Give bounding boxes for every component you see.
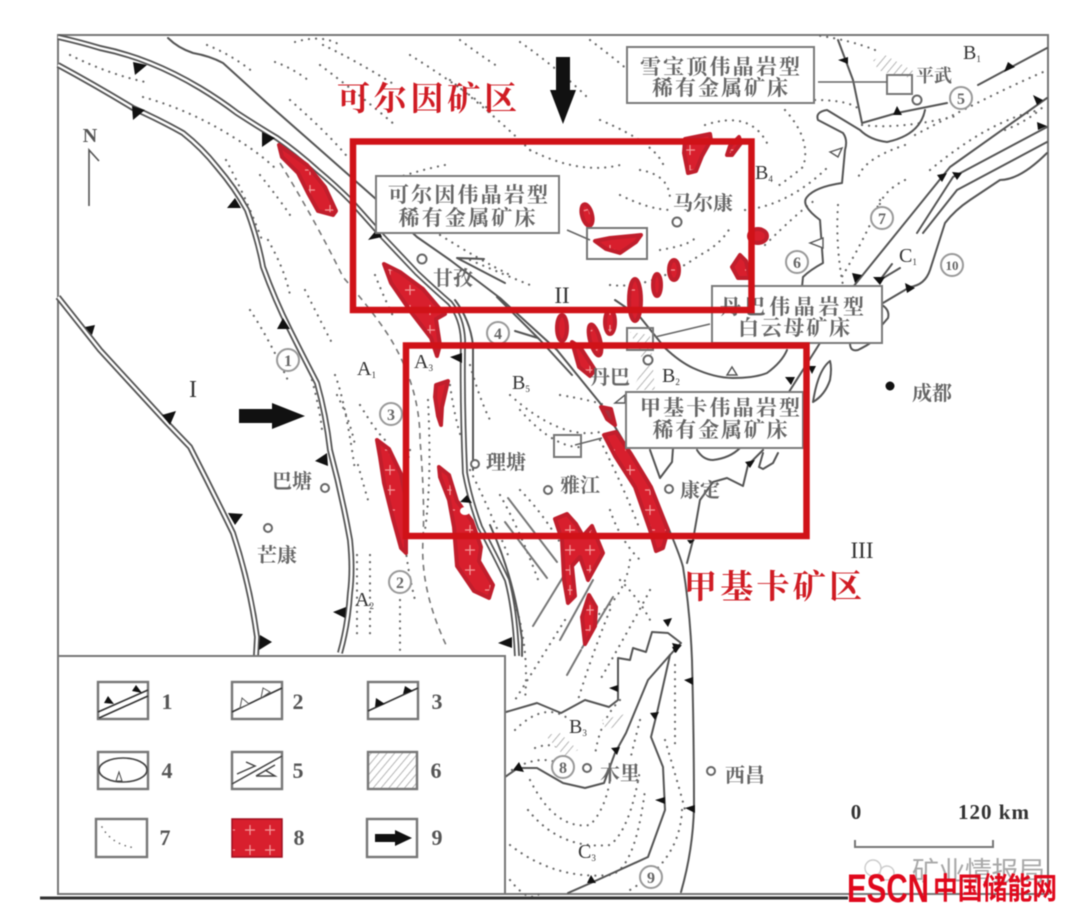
legend panel (58, 656, 505, 894)
legend 4: dome: 4 (162, 758, 172, 783)
city markers and names: 成都 (912, 382, 952, 405)
legend 2: open triangle fault: 2 (292, 689, 304, 714)
callout: Danba deposit: 白云母矿床 (738, 316, 850, 340)
fault: northern double line (58, 37, 517, 656)
tectonic unit labels (189, 42, 981, 863)
circled fault numbers: 4 (494, 326, 502, 343)
scale bar (851, 800, 1030, 847)
pegmatite bodies (279, 134, 767, 644)
tectonic unit labels: II (554, 283, 570, 308)
callout: Xuebaoding deposit (627, 47, 814, 103)
callout: Xuebaoding deposit: 雪宝顶伟晶岩型 (640, 55, 800, 79)
legend 6: hatched zone: 6 (430, 758, 442, 783)
legend 1: double-line thrust (98, 682, 172, 719)
circled fault numbers: 10 (946, 258, 958, 273)
city markers and names: 马尔康 (673, 191, 733, 215)
city markers and names: 康定 (680, 478, 720, 502)
hatched zones (545, 55, 915, 757)
deposit locator boxes (554, 75, 912, 457)
city markers and names: 西昌 (725, 764, 765, 787)
tectonic unit labels: A (414, 351, 428, 373)
tectonic unit labels: 4 (768, 174, 773, 184)
tectonic unit labels: 5 (525, 384, 530, 394)
tectonic unit labels: C (899, 245, 912, 267)
callout: Jiajika deposit (626, 392, 803, 448)
minor faults near Yajiang (505, 498, 613, 675)
logo: ESCN China Energy Storage Network: ESCN (847, 867, 929, 911)
tectonic unit labels: 2 (675, 377, 680, 387)
arrow: compression from west (239, 403, 305, 429)
callout: Keeryin deposit: 可尔因伟晶岩型 (388, 183, 548, 207)
city markers and names: 理塘 (486, 451, 526, 474)
circled fault numbers: 6 (793, 255, 801, 272)
legend 6: hatched zone (368, 752, 442, 789)
legend 4: dome (98, 752, 172, 789)
legend 8: pegmatite pattern: 8 (294, 825, 304, 850)
legend 8: pegmatite pattern (232, 819, 304, 857)
callout: Danba deposit: 丹巴伟晶岩型 (720, 295, 864, 319)
fault: far west double line (58, 297, 257, 656)
legend 3: thrust fault (368, 682, 442, 719)
circled fault numbers (277, 87, 972, 888)
tectonic unit labels: 1 (976, 54, 981, 64)
logo: ESCN China Energy Storage Network: 中国储能网 (933, 873, 1057, 906)
tectonic unit labels: 1 (371, 370, 376, 380)
slip arrows (457, 258, 505, 283)
legend 9: arrow: 9 (432, 825, 442, 850)
circled fault numbers: 7 (878, 211, 886, 228)
scale bar: 0 (851, 800, 861, 824)
legend 5: strike-slip fault (232, 752, 304, 789)
legend 1: double-line thrust: 1 (162, 689, 172, 714)
red frame: Jiajika ore district (406, 346, 806, 536)
callout: Jiajika deposit: 甲基卡伟晶岩型 (640, 396, 800, 420)
circled fault numbers: 9 (647, 870, 655, 887)
dashed thrust trace (280, 163, 447, 647)
city markers and names: 丹巴 (590, 366, 630, 389)
callout: Keeryin deposit (376, 176, 559, 233)
tectonic unit labels: 2 (369, 601, 374, 611)
tectonic unit labels: III (851, 538, 873, 563)
scale bar: 120 km (958, 800, 1030, 824)
legend 7: dotted contour: 7 (160, 825, 170, 850)
tectonic unit labels: 3 (591, 853, 596, 863)
north arrow: N (83, 125, 98, 147)
circled fault numbers: 3 (387, 407, 395, 424)
callout: Danba deposit (712, 286, 882, 343)
heading: Jiajika ore district: 甲基卡矿区 (684, 569, 862, 606)
bottom rule (40, 896, 848, 900)
tectonic unit labels: A (355, 589, 369, 611)
legend 2: open triangle fault (232, 682, 304, 719)
circled fault numbers: 5 (957, 91, 965, 108)
tectonic unit labels: I (189, 377, 197, 403)
logo: ESCN China Energy Storage Network (847, 867, 1057, 911)
watermark: WeChat account: 矿业情报局 (912, 857, 1045, 887)
fault: jagged thrust (506, 632, 681, 713)
tectonic unit labels: A (357, 358, 371, 380)
tectonic unit labels: 3 (582, 728, 587, 738)
tectonic unit labels: C (578, 841, 591, 863)
city markers and names: 甘孜 (433, 267, 473, 290)
callout: Jiajika deposit: 稀有金属矿床 (652, 418, 788, 442)
legend 9: arrow (367, 819, 442, 857)
heading: Keeryin ore district: 可尔因矿区 (337, 81, 517, 118)
city markers and names: 雅江 (560, 474, 600, 497)
fault: central east thrust (787, 343, 820, 395)
tectonic unit labels: B (963, 42, 976, 64)
legend 3: thrust fault: 3 (432, 689, 442, 714)
tectonic unit labels: B (512, 372, 525, 394)
fault: top right thrust system (838, 40, 947, 123)
callout: Keeryin deposit: 稀有金属矿床 (398, 206, 536, 230)
legend 7: dotted contour (96, 819, 170, 857)
city markers and names: 芒康 (257, 543, 297, 567)
city markers and names: 巴塘 (272, 470, 312, 493)
city markers and names: 木里 (600, 762, 640, 785)
circled fault numbers: 2 (396, 575, 404, 592)
tectonic unit labels: B (662, 365, 675, 387)
tectonic unit labels: B (569, 716, 582, 738)
legend 5: strike-slip fault: 5 (292, 758, 304, 783)
circled fault numbers: 1 (284, 353, 292, 370)
city markers and names: 平武 (916, 66, 952, 86)
red frame: Keeryin ore district (353, 142, 752, 310)
callout leaders (567, 82, 887, 445)
tectonic unit labels: 3 (428, 363, 433, 373)
callout: Xuebaoding deposit: 稀有金属矿床 (652, 76, 788, 100)
city markers and names (257, 66, 952, 787)
arrow: compression from north (550, 57, 576, 124)
fault: western double line (58, 65, 352, 653)
thrust teeth (85, 57, 1047, 883)
tectonic unit labels: B (755, 162, 768, 184)
circled fault numbers: 8 (559, 760, 567, 777)
open triangles (615, 148, 842, 403)
north arrow (83, 125, 99, 206)
fault: Xianshuihe single lines (168, 38, 694, 892)
tectonic unit labels: 1 (912, 257, 917, 267)
